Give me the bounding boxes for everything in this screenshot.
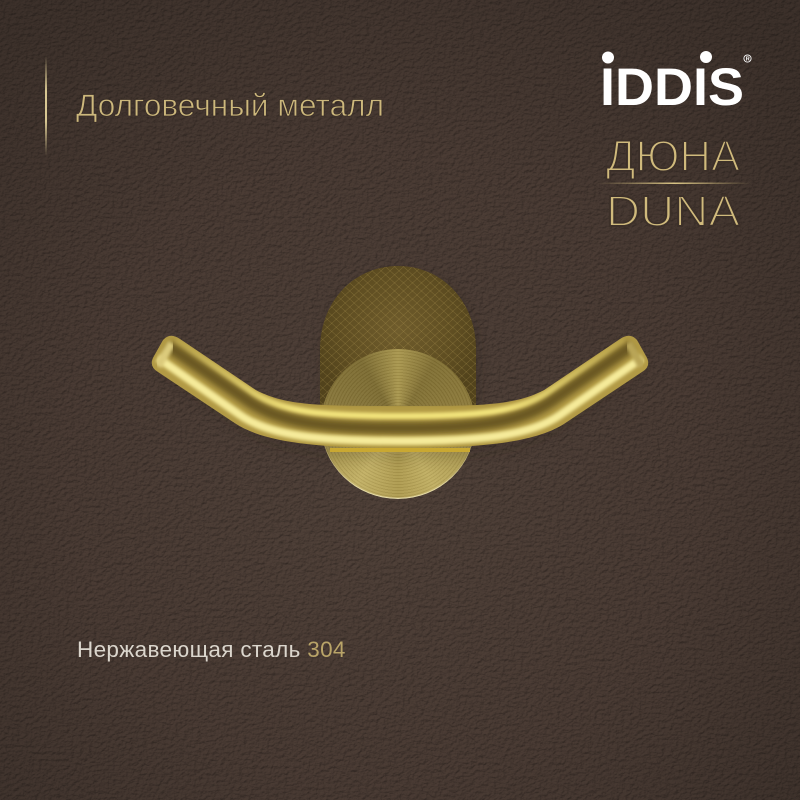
upper highlight of tube (176, 340, 624, 416)
lower rim (336, 446, 463, 448)
lower highlight of tube (158, 358, 642, 441)
collection name: Latin: DUNA (606, 187, 741, 236)
upper rim (323, 405, 477, 406)
caption: stainless steel 304: Нержавеющая сталь 304 (77, 637, 346, 662)
vertical accent line (45, 56, 47, 156)
brushed round plate (321, 349, 475, 499)
collection name: Cyrillic: ДЮНА (606, 132, 741, 181)
heading: durable metal: Долговечный металл (76, 87, 384, 123)
logo: IDDIS: IDDIS (600, 58, 744, 117)
curved hook tube (152, 336, 648, 463)
product: gold double hook (152, 266, 648, 499)
logo: IDDIS: R (746, 56, 750, 62)
end caps (158, 343, 172, 366)
dark mid band of tube (168, 346, 632, 428)
collection divider (597, 182, 752, 184)
